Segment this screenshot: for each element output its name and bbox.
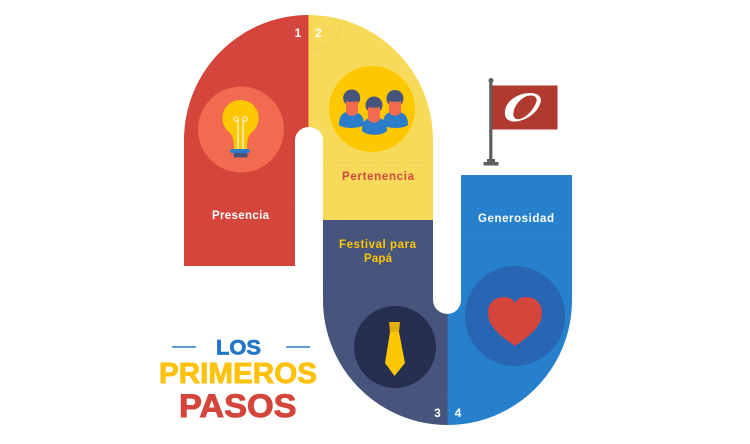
title: Los primeros pasos xyxy=(159,336,317,424)
icon: light bulb xyxy=(198,86,284,172)
label: Generosidad: Generosidad xyxy=(478,213,554,225)
panel: red Presencia segment xyxy=(184,15,308,266)
number 4: 4 xyxy=(455,406,462,420)
panel: yellow Pertenencia segment xyxy=(308,15,433,220)
person middle xyxy=(362,96,387,135)
label: Festival para Papá: Festival para xyxy=(339,239,417,251)
label: Presencia: Presencia xyxy=(212,210,270,222)
label: Festival para Papá: Papá xyxy=(364,253,393,265)
person left xyxy=(339,90,364,128)
number 3: 3 xyxy=(434,406,441,420)
icon: group of people xyxy=(329,66,415,152)
flag logo O xyxy=(505,93,541,122)
icon: heart xyxy=(465,266,565,366)
title: Los primeros pasos: PASOS xyxy=(179,388,296,424)
panel: blue Generosidad segment xyxy=(448,175,572,425)
number 1: 1 xyxy=(295,26,302,40)
person right xyxy=(383,90,408,128)
title: Los primeros pasos: LOS xyxy=(216,336,261,360)
icon: necktie xyxy=(354,306,436,388)
icon: flag xyxy=(484,78,558,166)
label: Festival para Papá xyxy=(339,239,417,265)
title: Los primeros pasos: PRIMEROS xyxy=(159,358,317,390)
number 2: 2 xyxy=(315,26,322,40)
label: Pertenencia: Pertenencia xyxy=(342,171,415,183)
panel: navy Festival para Papá segment xyxy=(323,220,448,425)
